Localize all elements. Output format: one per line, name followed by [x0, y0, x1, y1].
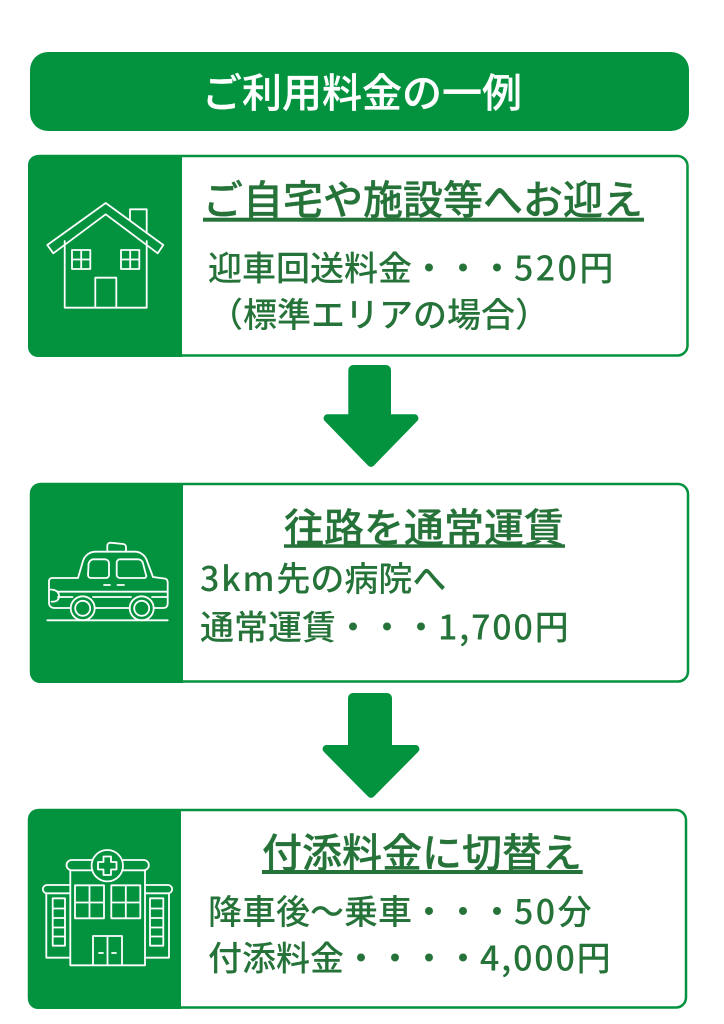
text: attendance charge: 付添料金・・・・4,000円 — [208, 932, 611, 980]
panel: outbound fare — [30, 483, 688, 683]
text: pick-up fee: 迎車回送料金・・・520円 — [208, 242, 613, 290]
text: regular fare: 通常運賃・・・1,700円 — [200, 600, 569, 650]
text: 3km destination: 3km先の病院へ — [200, 552, 446, 601]
icon: taxi — [47, 543, 168, 620]
arrow: down 1 — [324, 365, 418, 467]
arrow: down 2 — [323, 693, 419, 798]
heading: pick-up: ご自宅や施設等へお迎え — [203, 168, 643, 226]
heading: outbound fare: 往路を通常運賃 — [284, 496, 564, 554]
icon: house — [47, 203, 163, 308]
title banner — [30, 52, 689, 131]
panel: attendance fee — [28, 809, 686, 1009]
text: standard area note: （標準エリアの場合） — [209, 288, 549, 337]
panel: pick-up at home or facility — [28, 155, 688, 357]
text: waiting time: 降車後～乗車・・・50分 — [208, 885, 592, 934]
heading: attendance fee: 付添料金に切替え — [262, 821, 582, 879]
icon: hospital — [43, 850, 172, 965]
title banner: ご利用料金の一例 — [202, 61, 522, 119]
